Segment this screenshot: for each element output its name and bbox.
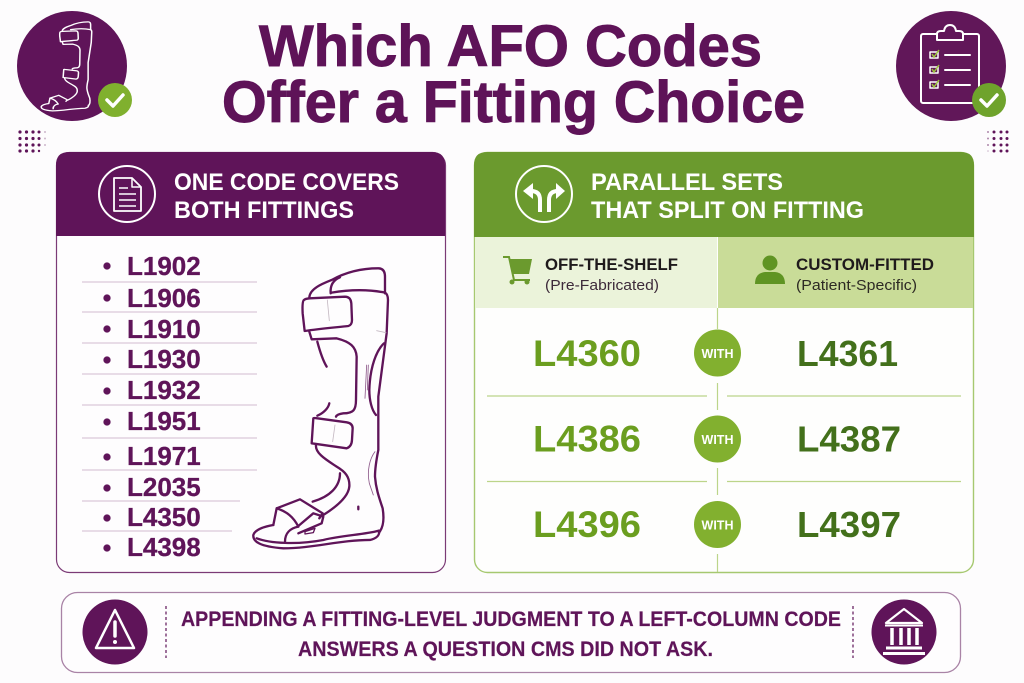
icon: warning [82, 600, 148, 664]
heading: right [591, 169, 864, 224]
row: L4360 with L4361: WITH [702, 347, 733, 361]
row: L4386 with L4387: WITH [702, 433, 733, 447]
row: L4386 with L4387: L4387 [797, 418, 901, 460]
row: L4396 with L4397: L4396 [533, 504, 641, 545]
code list: L1906 [127, 283, 201, 313]
callout text [181, 608, 841, 661]
panel header: left [56, 152, 445, 236]
code list: L4398 [127, 532, 201, 562]
icon: clipboard badge [896, 11, 1006, 121]
panel: parallel sets that split on fitting [474, 152, 974, 572]
column head: custom-fitted [718, 237, 973, 308]
icon: check badge right [972, 83, 1006, 117]
row: L4360 with L4361 [533, 330, 898, 376]
row: L4396 with L4397: L4397 [797, 504, 901, 545]
dots right [987, 130, 1008, 152]
icon: person [755, 256, 785, 284]
dots left [18, 130, 46, 153]
row: L4386 with L4387: L4386 [533, 418, 641, 460]
illustration: ankle-foot brace [253, 268, 388, 548]
code list: L1971 [127, 441, 201, 471]
row dividers [487, 308, 961, 572]
title [222, 14, 805, 135]
list dividers [82, 282, 257, 531]
row: L4386 with L4387 [533, 416, 901, 462]
icon: institution [872, 600, 936, 664]
title: Offer a Fitting Choice [222, 70, 805, 135]
heading: left: BOTH FITTINGS [174, 197, 354, 224]
row: L4360 with L4361: L4361 [797, 333, 898, 374]
row: L4396 with L4397: WITH [702, 518, 733, 532]
code list: L1930 [127, 344, 201, 374]
row: L4396 with L4397 [533, 501, 901, 548]
icon: split arrows [516, 166, 572, 222]
column head: off-the-shelf: OFF-THE-SHELF [545, 255, 678, 274]
callout text: ANSWERS A QUESTION CMS DID NOT ASK. [298, 638, 713, 661]
title: Which AFO Codes [259, 14, 762, 79]
heading: right: THAT SPLIT ON FITTING [591, 197, 864, 224]
column head: custom-fitted: CUSTOM-FITTED [796, 255, 934, 274]
heading: right: PARALLEL SETS [591, 169, 783, 196]
code list: L1932 [127, 375, 201, 405]
code list: L2035 [127, 472, 201, 502]
code list [104, 251, 201, 562]
callout text: APPENDING A FITTING-LEVEL JUDGMENT TO A LEFT-COLUMN CODE [181, 608, 841, 631]
code list: L4350 [127, 502, 201, 532]
code list: L1910 [127, 314, 201, 344]
code list: L1951 [127, 406, 201, 436]
column head: off-the-shelf: (Pre-Fabricated) [545, 277, 659, 294]
icon: check badge left [98, 83, 132, 117]
panel: one code covers both fittings [56, 152, 446, 572]
callout [62, 592, 960, 672]
icon: document [99, 166, 155, 222]
column head: off-the-shelf [475, 237, 717, 308]
code list: L1902 [127, 251, 201, 281]
column head: custom-fitted: (Patient-Specific) [796, 277, 917, 294]
row: L4360 with L4361: L4360 [533, 333, 641, 374]
panel header: right [474, 152, 974, 237]
icon: brace badge [17, 11, 127, 121]
heading: left [174, 169, 399, 224]
heading: left: ONE CODE COVERS [174, 169, 399, 196]
icon: cart [503, 257, 532, 284]
